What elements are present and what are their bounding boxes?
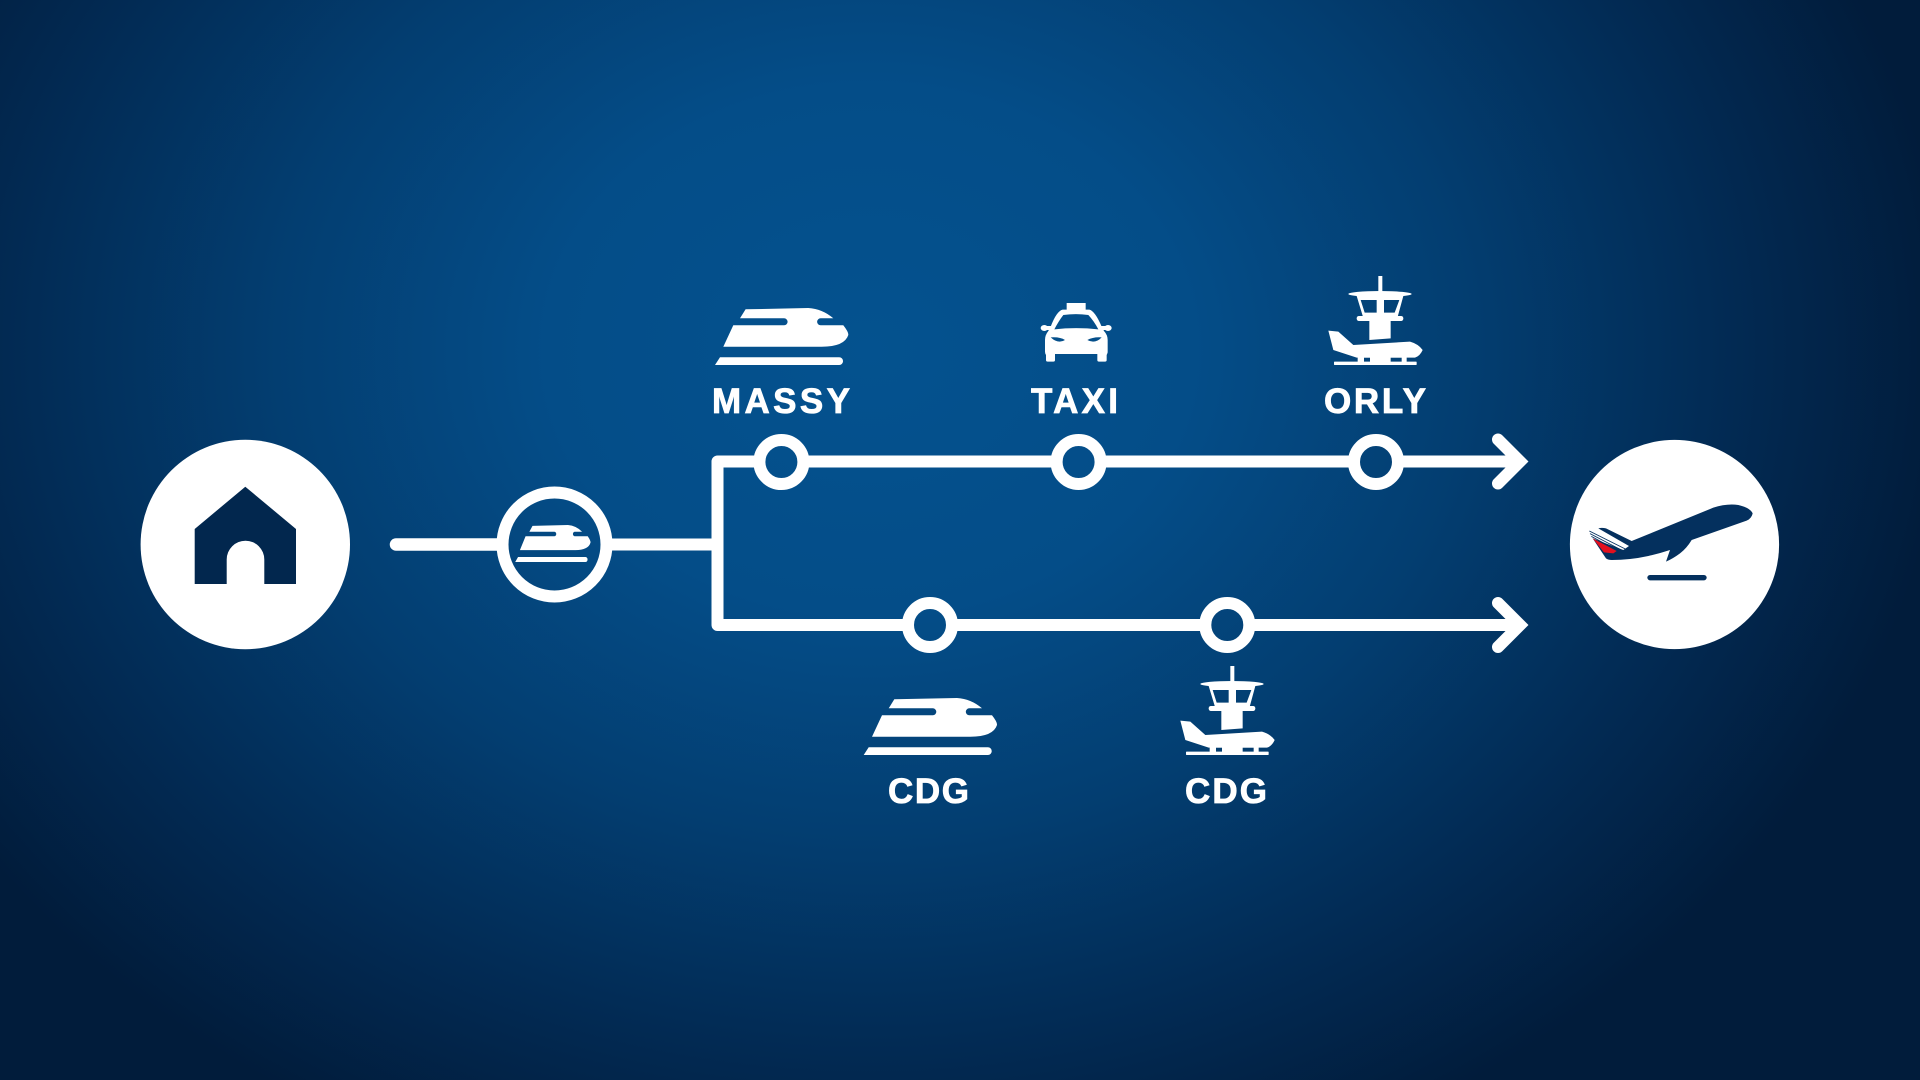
line: upper route with arrow bbox=[805, 440, 1520, 484]
node: Orly stop bbox=[1354, 440, 1398, 484]
node: Taxi stop bbox=[1057, 440, 1101, 484]
node: Massy stop bbox=[759, 440, 803, 484]
label: ORLY: ORLY bbox=[1324, 382, 1426, 421]
icon: control tower and plane, Orly bbox=[1328, 276, 1423, 365]
node: CDG airport stop bbox=[1205, 603, 1249, 647]
icon: train station node bbox=[502, 492, 606, 596]
label: CDG train: CDG bbox=[888, 772, 969, 811]
line: fork bracket with first segments bbox=[718, 462, 910, 625]
icon: train Massy bbox=[715, 308, 848, 365]
line: home to first train bbox=[396, 538, 498, 551]
line: connector to route fork bbox=[606, 538, 718, 550]
icon: taxi bbox=[1041, 303, 1112, 362]
icon: train CDG bbox=[864, 698, 997, 755]
label: CDG airport: CDG bbox=[1185, 772, 1267, 811]
icon: home in white circle bbox=[141, 440, 350, 649]
node: CDG train stop bbox=[908, 603, 952, 647]
icon: departing plane in white circle bbox=[1570, 440, 1779, 649]
line: lower route with arrow bbox=[950, 603, 1520, 647]
icon: control tower and plane, CDG bbox=[1180, 666, 1275, 755]
label: TAXI: TAXI bbox=[1031, 382, 1118, 421]
label: MASSY: MASSY bbox=[712, 382, 850, 421]
